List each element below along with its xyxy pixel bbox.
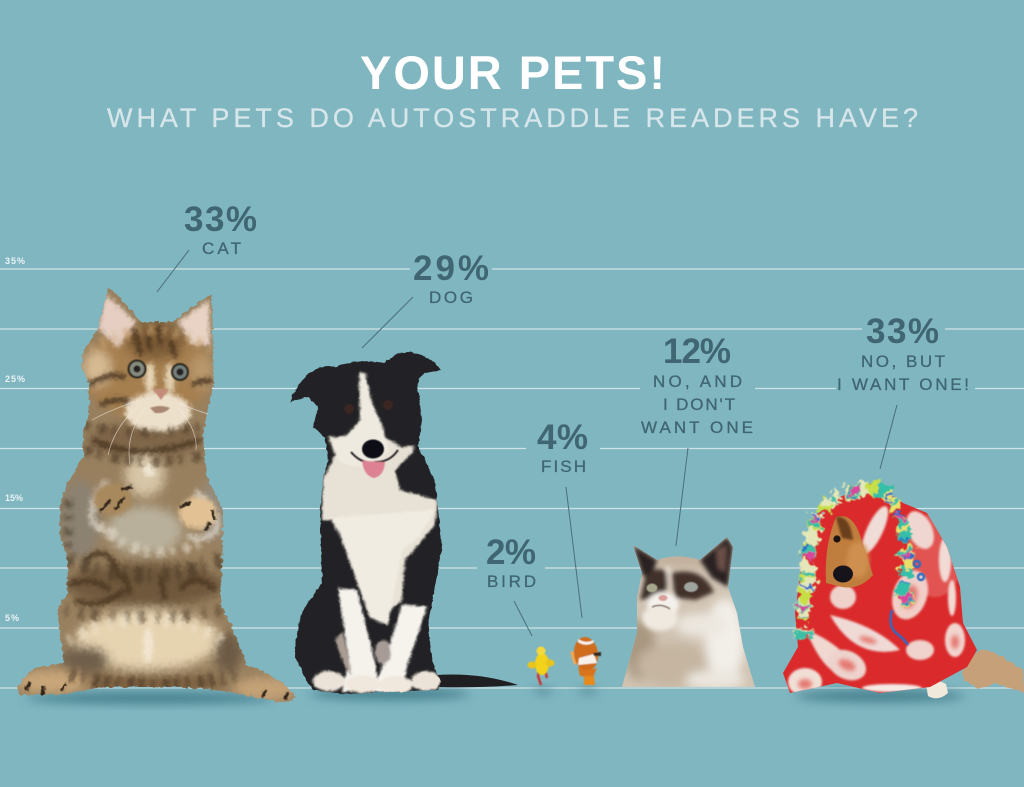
axis labels — [5, 256, 25, 623]
cat whiskers — [92, 400, 208, 465]
label: cat 33%: CAT — [202, 239, 241, 258]
title: YOUR PETS! — [360, 46, 665, 99]
label: no but want one 33%: NO, BUT — [861, 352, 945, 371]
subtitle: WHAT PETS DO AUTOSTRADDLE READERS HAVE? — [107, 103, 918, 133]
label: no but want one 33%: I WANT ONE! — [837, 375, 969, 394]
scale grid lines — [0, 269, 1024, 688]
ground shadows — [25, 688, 965, 704]
label: cat 33% — [184, 200, 257, 258]
label: bird 2%: 2% — [486, 533, 536, 572]
label: dog 29% — [413, 249, 489, 307]
label: no but want one 33%: 33% — [866, 312, 939, 351]
leader lines — [157, 250, 897, 636]
pet: cat — [10, 285, 300, 705]
pet: grumpy cat — [620, 535, 760, 690]
dog face peeking out — [826, 516, 873, 588]
cat fur streaks — [65, 330, 235, 685]
pet: dog — [285, 345, 518, 700]
pet: bird — [528, 646, 554, 685]
label: bird 2% — [486, 533, 536, 591]
axis labels: 5% — [5, 613, 19, 623]
dog face — [344, 400, 398, 478]
label: no and don't want one 12%: 12% — [663, 332, 731, 371]
label: no and don't want one 12% — [641, 332, 753, 437]
label: fish 4%: 4% — [537, 418, 588, 457]
pet: dog wrapped in paper with streamers — [780, 480, 1024, 700]
label: no but want one 33% — [837, 312, 969, 394]
dog tail and paw — [926, 649, 1024, 698]
streamers — [803, 488, 910, 637]
label: no and don't want one 12%: NO, AND — [653, 372, 742, 391]
label: fish 4% — [537, 418, 588, 476]
axis labels: 35% — [5, 256, 25, 266]
wrap red detail in patches — [798, 583, 959, 689]
label: fish 4%: FISH — [541, 457, 586, 476]
axis labels: 25% — [5, 374, 25, 384]
pet: fish — [570, 635, 601, 685]
label: cat 33%: 33% — [184, 200, 257, 239]
axis labels: 15% — [5, 493, 23, 503]
label: bird 2%: BIRD — [487, 572, 536, 591]
label: no and don't want one 12%: I DON'T — [663, 395, 735, 414]
label: no and don't want one 12%: WANT ONE — [641, 418, 753, 437]
label: dog 29%: 29% — [413, 249, 489, 288]
dog tail — [436, 674, 518, 687]
label: dog 29%: DOG — [429, 288, 473, 307]
